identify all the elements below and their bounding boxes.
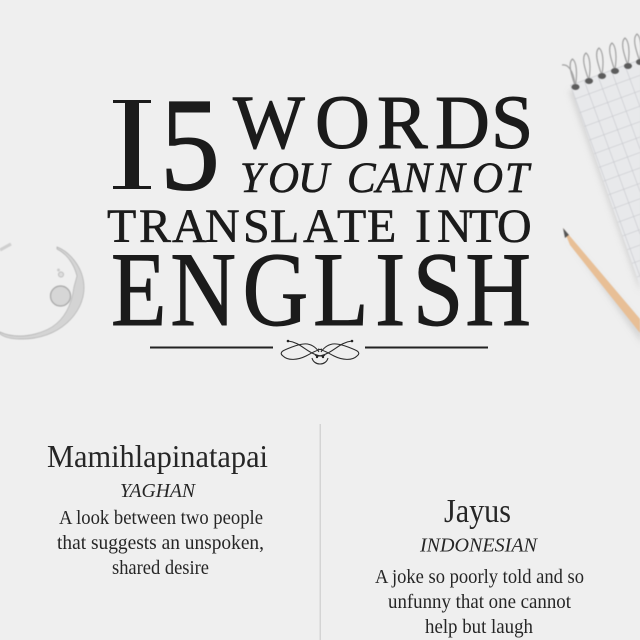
title line: YOU CANNOT: YOU CANNOT bbox=[240, 155, 532, 202]
word: Jayus bbox=[444, 493, 511, 530]
definition: help but laugh bbox=[425, 616, 533, 638]
title line: ENGLISH: ENGLISH bbox=[111, 232, 531, 349]
entry: Jayus bbox=[375, 493, 584, 638]
title bbox=[107, 70, 533, 349]
icon: spiral notebook bbox=[562, 34, 640, 292]
definition: that suggests an unspoken, bbox=[57, 532, 264, 554]
language: INDONESIAN bbox=[419, 534, 539, 556]
ornamental divider bbox=[150, 340, 488, 364]
icon: pencil bbox=[563, 228, 640, 344]
title number: 15 bbox=[113, 70, 220, 218]
definition bbox=[375, 566, 584, 638]
entry: Mamihlapinatapai bbox=[47, 438, 268, 579]
title line: WORDS: WORDS bbox=[233, 81, 533, 165]
definition: A look between two people bbox=[59, 507, 263, 529]
title number: 15: 1 bbox=[122, 74, 142, 218]
language: YAGHAN bbox=[120, 480, 197, 502]
icon: coffee ring stain bbox=[0, 244, 84, 339]
definition: A joke so poorly told and so bbox=[375, 566, 584, 588]
definition: shared desire bbox=[112, 557, 209, 579]
definition: unfunny that one cannot bbox=[388, 591, 571, 613]
title line: TRANSLATE INTO: TRANSLATE INTO bbox=[107, 200, 532, 253]
word: Mamihlapinatapai bbox=[47, 438, 268, 474]
title number: 15: 5 bbox=[160, 70, 220, 218]
definition bbox=[57, 507, 264, 579]
